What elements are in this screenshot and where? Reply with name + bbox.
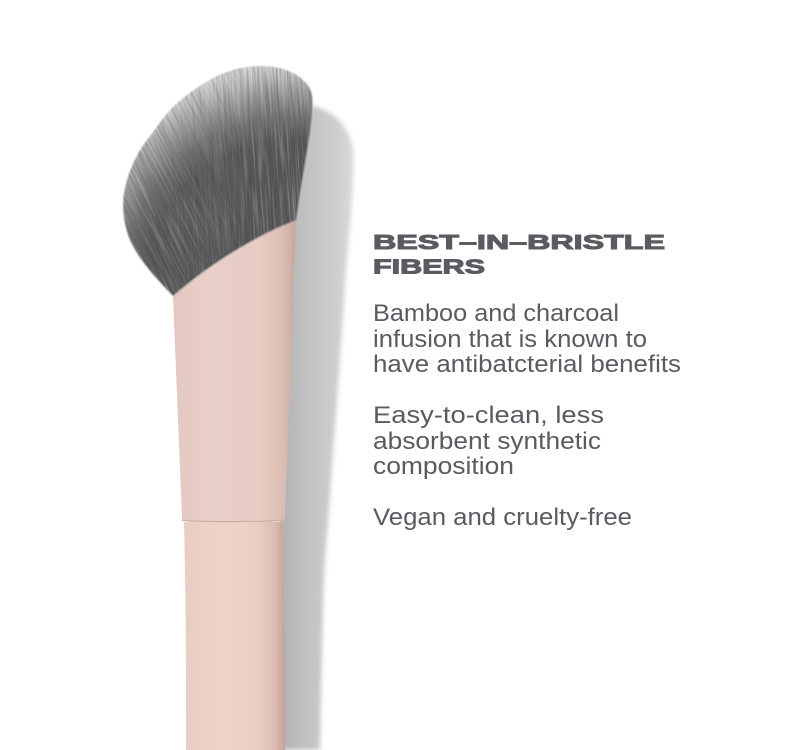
- brush handle: [184, 520, 285, 750]
- benefit: easy to clean: composition: [373, 453, 514, 480]
- benefit: easy to clean: Easy-to-clean, less: [373, 402, 604, 429]
- benefit: antibacterial infusion: Bamboo and charcoal: [373, 300, 619, 327]
- heading: BEST–IN–BRISTLE: [373, 231, 665, 254]
- ferrule seam: [182, 520, 285, 522]
- benefit: antibacterial infusion: [373, 300, 681, 378]
- heading: FIBERS: [373, 256, 485, 278]
- benefit: vegan: Vegan and cruelty-free: [373, 504, 632, 531]
- infographic canvas: [122, 65, 680, 750]
- benefit: antibacterial infusion: have antibatcterial benefits: [373, 351, 681, 378]
- heading: [373, 231, 665, 278]
- benefit: easy to clean: absorbent synthetic: [373, 428, 601, 455]
- brush: [122, 65, 314, 750]
- brush ferrule: [173, 220, 296, 521]
- bristles: [122, 65, 314, 296]
- benefit: antibacterial infusion: infusion that is known to: [373, 326, 647, 353]
- cast shadow of brush: [280, 106, 353, 750]
- benefit: easy to clean: [373, 402, 604, 480]
- text block: [373, 231, 681, 531]
